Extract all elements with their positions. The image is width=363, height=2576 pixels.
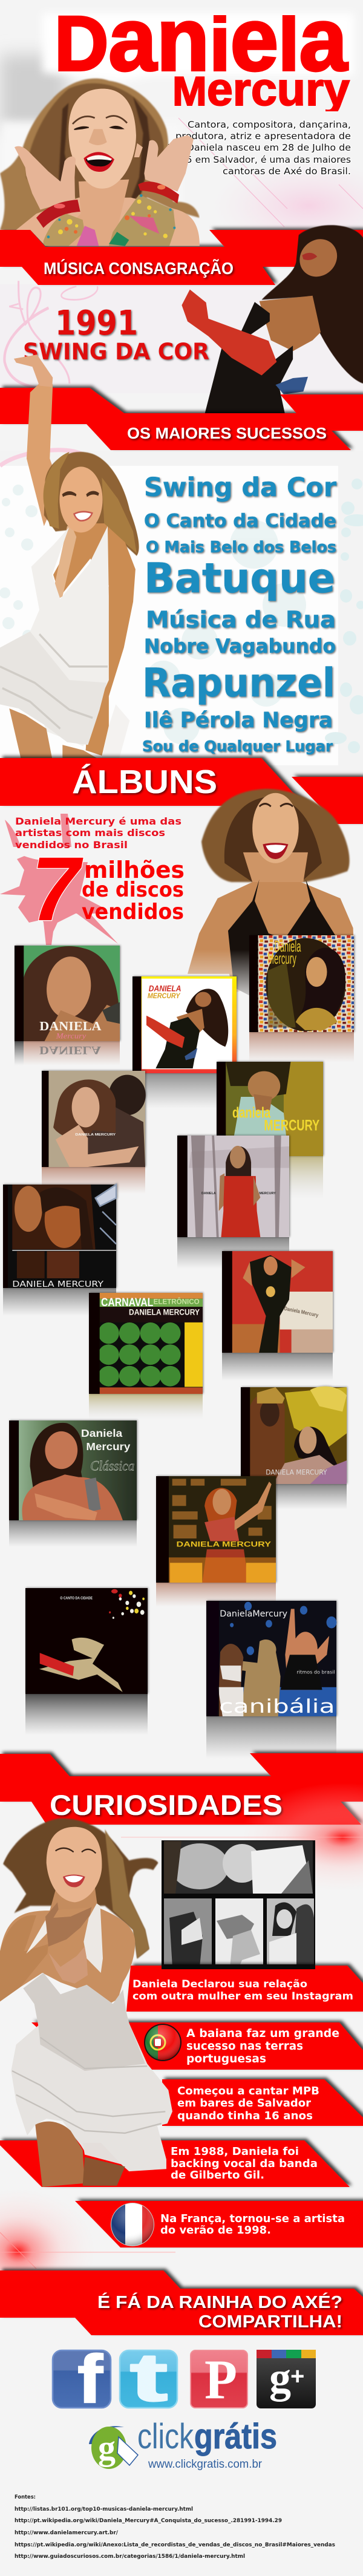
logo mark: g [98, 2428, 116, 2467]
icon: twitter: t [130, 2339, 168, 2415]
photo collage [162, 1840, 315, 1969]
icon: pinterest [191, 2349, 247, 2410]
album 12: DANIELA MERCURY [177, 1541, 272, 1549]
fact 2: portugal: portuguesas [186, 2052, 266, 2065]
sources: http://www.danielamercury.art.br/ [15, 2530, 119, 2536]
fact 4: backing vocal [0, 2140, 350, 2187]
icon: google plus [257, 2350, 316, 2408]
list: top songs: Rapunzel [142, 661, 335, 706]
icon: france flag [111, 2202, 154, 2247]
collage: top photo [164, 1841, 313, 1894]
fact 1: instagram: Daniela Declarou sua relação [132, 1978, 307, 1990]
stat: 7 milhões: 7 [31, 838, 83, 940]
banner heading: OS MAIORES SUCESSOS [127, 424, 327, 442]
section background: songs [0, 450, 363, 783]
banner: os maiores sucessos [0, 388, 363, 450]
logo: clickgrátis: grátis [194, 2417, 277, 2456]
album 6 [177, 1136, 289, 1269]
album 1: Mercury [55, 1032, 87, 1041]
sources: http://pt.wikipedia.org/wiki/Daniela_Mercury#A_Conquista_do_sucesso_.281991-1994.29 [15, 2518, 282, 2524]
sources: http://www.guiadoscuriosos.com.br/categorias/1586/1/daniela-mercury.html [15, 2554, 245, 2560]
album 5: daniela [232, 1104, 271, 1121]
banner heading: ÁLBUNS [72, 763, 217, 800]
icon: pinterest: P [204, 2349, 237, 2410]
list: top songs: O Canto da Cidade [144, 511, 336, 532]
photo: woman reaching out [0, 1819, 172, 2187]
sources: https://pt.wikipedia.org/wiki/Anexo:Lista_de_recordistas_de_vendas_de_discos_no_Brasil#Maiores_vendas [15, 2542, 335, 2548]
icon: twitter [120, 2339, 177, 2415]
photo: smiling woman [0, 79, 200, 246]
list: top songs: Batuque [144, 555, 335, 603]
social icons [53, 2339, 316, 2417]
stat: 7 milhões: vendidos [82, 900, 184, 924]
banner heading: CURIOSIDADES [50, 1789, 283, 1821]
album 1: DANIELA [39, 1019, 102, 1034]
decoration: red ink splatter [0, 814, 118, 945]
album 2 [132, 976, 237, 1108]
intro paragraph: cantoras de Axé do Brasil. [223, 166, 351, 177]
heading: 1991 swing da cor: SWING DA COR [23, 339, 209, 365]
album 6: DANIELA [201, 1192, 216, 1195]
album 14: canibália [219, 1695, 335, 1718]
album grid [3, 935, 354, 1759]
list: top songs: O Mais Belo dos Belos [146, 538, 336, 557]
album 7: DANIELA MERCURY [12, 1279, 104, 1289]
logo: clickgrátis: click [137, 2417, 194, 2456]
fact 4: backing vocal: Em 1988, Daniela foi [171, 2145, 299, 2158]
album 11: Mercury [86, 1440, 131, 1453]
album 11: Daniela [81, 1427, 123, 1439]
sources [15, 2494, 335, 2560]
album 2: MERCURY [148, 992, 181, 1000]
text: sales intro: artistas com mais discos [15, 827, 165, 839]
banner heading: MÚSICA CONSAGRAÇÃO [44, 259, 234, 278]
album 9: DANIELA MERCURY [129, 1307, 200, 1317]
photo: woman in white dress [0, 355, 139, 759]
banner: álbuns [0, 758, 363, 824]
fact 3: mpb: quando tinha 16 anos [177, 2110, 313, 2122]
collage: bottom right photo [267, 1898, 314, 1967]
stat: 7 milhões: milhões [84, 857, 185, 883]
intro paragraph: produtora, atriz e apresentadora de [175, 131, 351, 142]
fact 3: mpb: em bares de Salvador [177, 2097, 311, 2110]
logo: clickgrátis [89, 2417, 277, 2471]
fact 3: mpb [162, 2079, 363, 2126]
heading: 1991 swing da cor [23, 304, 209, 365]
album 4: DANIELA MERCURY [75, 1133, 116, 1137]
intro paragraph [168, 119, 351, 177]
fact 1: instagram [126, 1966, 363, 2012]
album 5 [217, 1062, 323, 1200]
fact 1: instagram: com outra mulher em seu Instagram [132, 1990, 353, 2002]
album 9: ELETRÔNICO [154, 1298, 200, 1306]
icon: facebook: f [77, 2341, 103, 2417]
banner: curiosidades [0, 1753, 363, 1825]
header backdrop [0, 13, 363, 393]
list: top songs [142, 472, 337, 755]
stat: 7 milhões [31, 838, 185, 940]
icon: google plus: + [290, 2363, 304, 2390]
title: Mercury [172, 64, 350, 116]
album 12 [156, 1476, 276, 1607]
decoration: red flare bottom [0, 2188, 175, 2315]
logo mark [89, 2426, 138, 2469]
fact 4: backing vocal: backing vocal da banda [171, 2157, 318, 2170]
album 4 [42, 1071, 146, 1194]
decoration: treble clef [4, 281, 97, 389]
list: top songs: Música de Rua [146, 607, 336, 633]
sources: http://listas.br101.org/top10-musicas-daniela-mercury.html [15, 2506, 193, 2512]
album 3: Daniela [274, 938, 301, 955]
title [58, 15, 350, 111]
banner: música consagração [0, 230, 363, 285]
intro paragraph: TV, Daniela nasceu em 28 de Julho de [168, 142, 351, 153]
album 14: ritmos do brasil [296, 1669, 335, 1675]
banner heading [97, 2292, 342, 2332]
fact 5: frança: Na França, tornou-se a artista [160, 2212, 345, 2225]
album 2: DANIELA [149, 984, 181, 993]
heading: 1991 swing da cor: 1991 [55, 304, 138, 343]
banner: call to share [0, 2270, 363, 2335]
album 7 [3, 1185, 116, 1316]
intro paragraph: 1965 em Salvador, é uma das maiores [168, 154, 351, 165]
album 8 [222, 1251, 333, 1381]
banner heading: COMPARTILHA! [198, 2312, 342, 2332]
collage bottom edge [162, 1964, 315, 1969]
album 10: DANIELA MERCURY [266, 1468, 327, 1477]
album 9: CARNAVAL [101, 1295, 153, 1309]
album 14: DanielaMercury [220, 1609, 287, 1619]
album 13: O CANTO DA CIDADE [60, 1597, 93, 1601]
collage: bottom middle photo [215, 1898, 263, 1967]
album 11 [9, 1420, 137, 1547]
album 1: DANIELA [39, 1044, 101, 1056]
photo: dancer in red gloves [182, 225, 363, 413]
album 6: MERCURY [259, 1192, 276, 1195]
collage: bottom left photo [164, 1898, 212, 1967]
banner heading: É FÁ DA RAINHA DO AXÉ? [97, 2292, 342, 2312]
list: top songs: Sou de Qualquer Lugar [142, 737, 333, 755]
sources: Fontes: [15, 2494, 36, 2500]
fact 3: mpb: Começou a cantar MPB [177, 2085, 319, 2097]
album 1 [15, 946, 120, 1065]
album 8: Daniela Mercury [284, 1305, 319, 1318]
photo: woman in black top [181, 789, 363, 1006]
icon: portugal flag [144, 2024, 182, 2061]
album 13 [25, 1588, 148, 1735]
text: sales intro: Daniela Mercury é uma das [15, 816, 182, 827]
stat: 7 milhões: de discos [82, 878, 184, 902]
list: top songs: Ilê Pérola Negra [144, 708, 333, 733]
logo: clickgrátis: www.clickgratis.com.br [148, 2458, 263, 2471]
fact 2: portugal: sucesso nas terras [186, 2039, 303, 2053]
icon: facebook [53, 2341, 111, 2417]
fact 5: frança [75, 2201, 363, 2247]
text: sales intro: vendidos no Brasil [15, 839, 128, 851]
fact 4: backing vocal: de Gilberto Gil. [171, 2169, 264, 2182]
album 14 [206, 1601, 336, 1759]
album 10 [241, 1387, 347, 1509]
fact 5: frança: do verão de 1998. [160, 2224, 271, 2237]
album 9 [89, 1293, 203, 1419]
fact 2: portugal [31, 2022, 363, 2070]
fact 2: portugal: A baiana faz um grande [186, 2027, 339, 2040]
album 11: Clássica [90, 1458, 134, 1474]
list: top songs: Nobre Vagabundo [144, 635, 336, 658]
intro paragraph: Cantora, compositora, dançarina, [188, 119, 351, 130]
list: top songs: Swing da Cor [144, 472, 337, 503]
album 3 [249, 935, 354, 1062]
text: sales intro [15, 816, 182, 851]
icon: google plus: g [269, 2353, 291, 2402]
album 3: Mercury [267, 950, 296, 968]
decoration: red flare top [121, 1783, 363, 1892]
